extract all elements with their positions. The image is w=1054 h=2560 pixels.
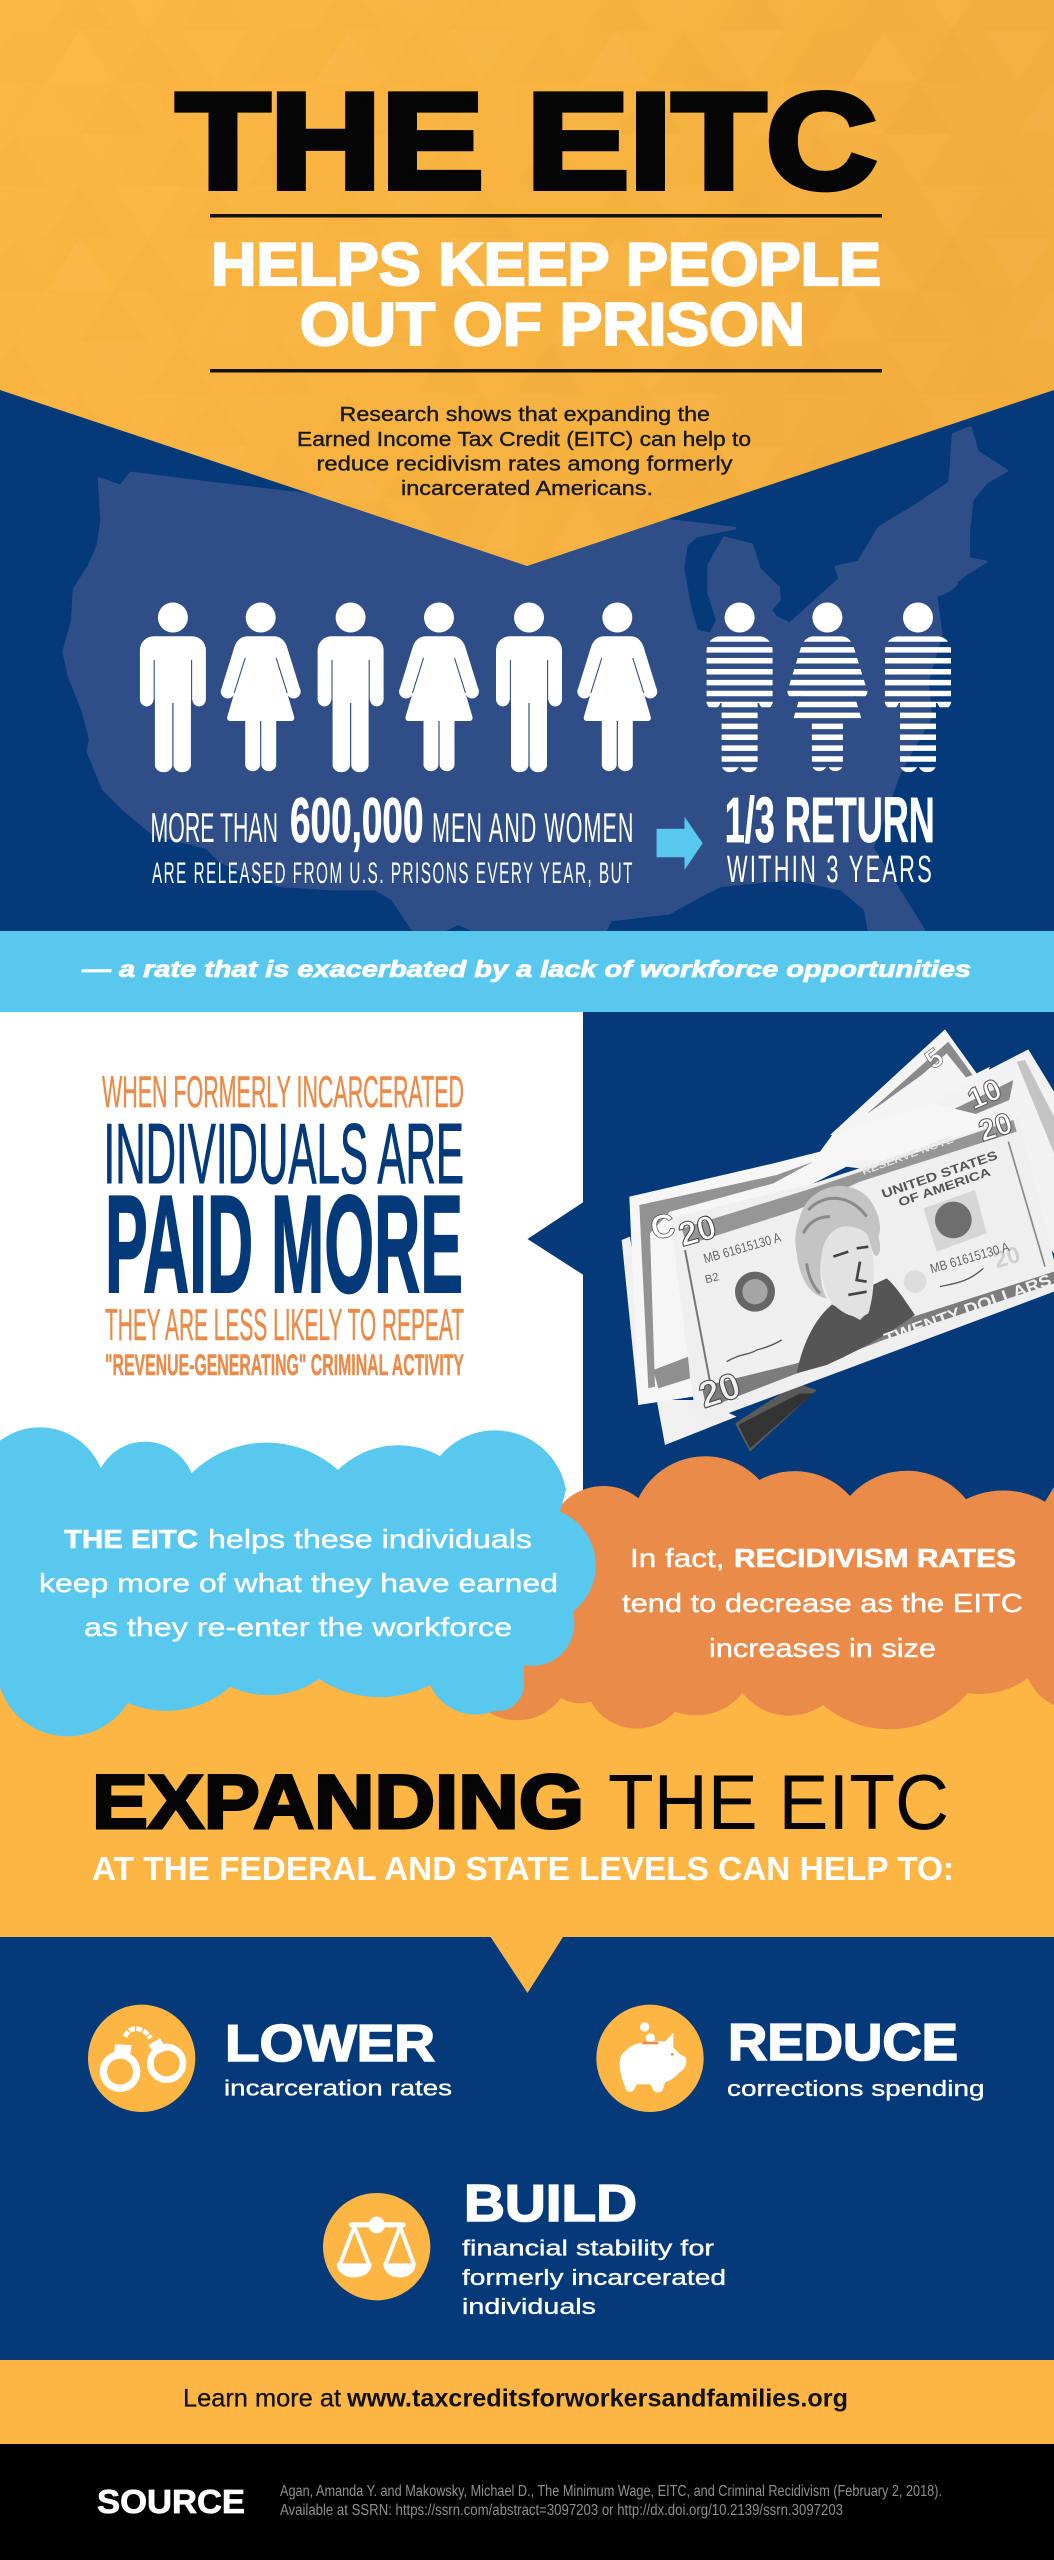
intro text block: Earned Income Tax Credit (EITC) can help to bbox=[297, 429, 751, 451]
photo illustration: stack of twenty dollar bills: 5 bbox=[919, 1042, 949, 1075]
map of the United States bbox=[64, 428, 1007, 930]
orange cloud bbox=[487, 1456, 1054, 1729]
outcome text: build: BUILD bbox=[464, 2174, 637, 2232]
arrow bbox=[657, 817, 703, 870]
icon: piggy bank bbox=[596, 2005, 704, 2112]
panel: yellow title chevron bbox=[0, 0, 1054, 566]
call to action band: www.taxcreditsforworkersandfamilies.org bbox=[346, 2384, 848, 2412]
heading: expanding the EITC: AT THE FEDERAL AND STATE LEVELS CAN HELP TO: bbox=[92, 1851, 954, 1888]
source footer: Available at SSRN: https://ssrn.com/abstract=3097203 or http://dx.doi.org/10.2139/ssrn.3097203 bbox=[280, 2502, 843, 2519]
paid more text block bbox=[102, 1068, 464, 1382]
source footer: SOURCE bbox=[97, 2484, 245, 2521]
heading: expanding the EITC bbox=[92, 1758, 954, 1888]
text: THEY ARE LESS LIKELY TO REPEAT bbox=[105, 1301, 464, 1350]
photo illustration: stack of twenty dollar bills: MB 61615130 A bbox=[928, 1239, 1011, 1276]
intro text block: incarcerated Americans. bbox=[401, 478, 653, 500]
blue cloud: helps these individuals bbox=[208, 1524, 532, 1554]
panel: navy money section bbox=[583, 1012, 1054, 1682]
photo illustration: stack of twenty dollar bills: 20 bbox=[694, 1364, 745, 1416]
statistic text: 600,000 released: MORE THAN bbox=[150, 804, 278, 851]
icon: balance scale bbox=[323, 2193, 430, 2300]
photo illustration: stack of twenty dollar bills: RESERVE NOTE bbox=[861, 1134, 955, 1177]
photo illustration: stack of twenty dollar bills bbox=[622, 1029, 1054, 1452]
title: HELPS KEEP PEOPLE bbox=[211, 231, 881, 298]
call to action band: Learn more at bbox=[183, 2384, 341, 2412]
outcome text: reduce: corrections spending bbox=[727, 2076, 984, 2101]
text: INDIVIDUALS ARE bbox=[104, 1107, 464, 1202]
outcome text: build: individuals bbox=[462, 2294, 596, 2319]
photo illustration: stack of twenty dollar bills: 10 bbox=[963, 1073, 1007, 1116]
call to action band bbox=[0, 2360, 1054, 2444]
outcome text: build: financial stability for bbox=[462, 2236, 715, 2260]
intro text block: reduce recidivism rates among formerly bbox=[316, 454, 732, 476]
people row: released men and women bbox=[140, 602, 657, 772]
speech pointer bbox=[528, 1202, 584, 1275]
photo illustration: stack of twenty dollar bills: OF AMERICA bbox=[896, 1165, 993, 1210]
blue cloud: THE EITC bbox=[64, 1524, 198, 1554]
blue cloud: keep more of what they have earned bbox=[39, 1568, 558, 1598]
title: OUT OF PRISON bbox=[300, 291, 805, 358]
photo illustration: stack of twenty dollar bills: UNITED STATES bbox=[880, 1148, 999, 1201]
panel: white paid-more section bbox=[0, 1012, 584, 1682]
statistic text: 600,000 released: MEN AND WOMEN bbox=[432, 804, 634, 851]
photo illustration: stack of twenty dollar bills: B2 bbox=[704, 1271, 720, 1286]
people row: striped returning prisoners bbox=[706, 602, 951, 772]
heading: expanding the EITC: EXPANDING bbox=[92, 1760, 584, 1845]
outcome text: reduce: REDUCE bbox=[728, 2013, 958, 2071]
title bbox=[176, 65, 882, 372]
intro text block: Research shows that expanding the bbox=[340, 404, 710, 426]
photo illustration: stack of twenty dollar bills: C bbox=[647, 1207, 679, 1248]
photo illustration: stack of twenty dollar bills: TWENTY DOLLARS bbox=[882, 1270, 1054, 1349]
orange cloud: tend to decrease as the EITC bbox=[622, 1588, 1023, 1618]
text: WHEN FORMERLY INCARCERATED bbox=[102, 1068, 464, 1117]
pointer triangle bbox=[491, 1937, 563, 1993]
icon: handcuffs bbox=[88, 2005, 195, 2112]
outcome text: lower: incarceration rates bbox=[224, 2076, 452, 2100]
orange cloud: RECIDIVISM RATES bbox=[734, 1543, 1016, 1573]
source footer bbox=[0, 2444, 1054, 2560]
blue cloud: as they re-enter the workforce bbox=[84, 1612, 512, 1642]
statistic text: 600,000 released bbox=[150, 786, 634, 890]
orange cloud: In fact, bbox=[630, 1543, 724, 1573]
outcome text: lower: LOWER bbox=[225, 2014, 435, 2072]
heading: expanding the EITC: THE EITC bbox=[608, 1758, 949, 1846]
photo illustration: stack of twenty dollar bills: MB 61615130 A bbox=[702, 1230, 783, 1266]
statistic text: 600,000 released: 600,000 bbox=[290, 786, 424, 856]
photo illustration: stack of twenty dollar bills: 20 bbox=[975, 1107, 1017, 1148]
callout band: — a rate that is exacerbated by a lack of workforce opportunities bbox=[81, 956, 971, 982]
title: THE EITC bbox=[176, 65, 877, 217]
panel: navy outcomes section bbox=[0, 1937, 1054, 2360]
callout band bbox=[0, 931, 1054, 1012]
outcome text: build bbox=[462, 2174, 726, 2319]
photo illustration: stack of twenty dollar bills: 20 bbox=[675, 1209, 721, 1254]
outcome text: build: formerly incarcerated bbox=[462, 2265, 726, 2290]
paid more text block: "REVENUE-GENERATING" CRIMINAL ACTIVITY bbox=[105, 1349, 464, 1382]
outcome text: reduce bbox=[727, 2013, 984, 2101]
panel: navy map section background bbox=[0, 385, 1054, 932]
intro text block bbox=[297, 404, 751, 500]
orange cloud: increases in size bbox=[709, 1633, 936, 1663]
text: PAID MORE bbox=[105, 1167, 463, 1322]
panel: yellow expanding section bbox=[0, 1672, 1054, 1937]
blue cloud bbox=[0, 1427, 596, 1736]
photo illustration: stack of twenty dollar bills: 20 bbox=[991, 1241, 1023, 1273]
statistic text: 1/3 return bbox=[725, 784, 935, 891]
outcome text: lower bbox=[224, 2014, 452, 2100]
